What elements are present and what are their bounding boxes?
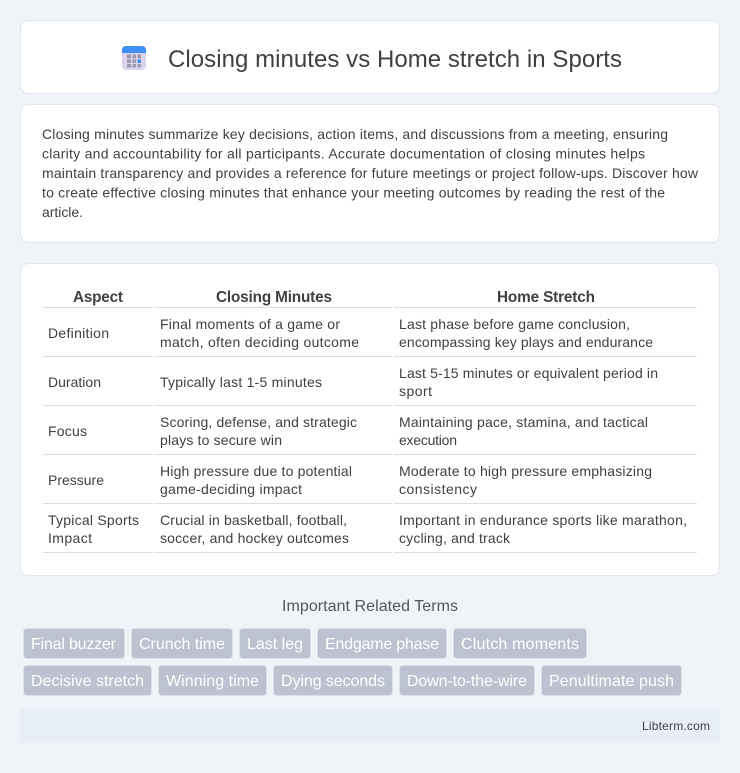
footer — [20, 709, 720, 743]
row: pressure: consistency — [399, 481, 477, 497]
row: focus: Maintaining pace, stamina, and tactical — [399, 414, 648, 430]
tag: decisive stretch: Decisive stretch — [31, 673, 144, 690]
tag: crunch time: Crunch time — [139, 636, 225, 653]
row: pressure: Moderate to high pressure emphasizing — [399, 463, 652, 479]
tag: decisive stretch — [24, 666, 152, 696]
row: definition: Definition — [48, 325, 109, 341]
row: typical sports impact: Important in endurance sports like marathon, — [399, 512, 687, 528]
table header — [73, 289, 595, 306]
heading: important related terms: Important Related Terms — [282, 598, 458, 615]
title: Closing minutes vs Home stretch in Sports — [168, 46, 622, 73]
row: pressure — [48, 463, 652, 497]
table header: Aspect — [73, 289, 123, 306]
table header: Closing Minutes — [216, 289, 332, 306]
row: typical sports impact: cycling, and track — [399, 530, 511, 546]
tag: clutch moments — [454, 628, 586, 658]
tag: penultimate push — [542, 666, 682, 696]
tag: final buzzer — [24, 628, 124, 658]
row: focus: execution — [399, 432, 457, 448]
row: typical sports impact: Crucial in basketball, football, — [160, 512, 347, 528]
row: focus: plays to secure win — [160, 432, 282, 448]
row: focus — [48, 414, 648, 448]
row: duration — [48, 365, 658, 399]
tag: clutch moments: Clutch moments — [461, 636, 579, 653]
row: definition: Final moments of a game or — [160, 316, 340, 332]
header panel — [20, 20, 720, 94]
row: typical sports impact: Impact — [48, 530, 92, 546]
row: duration: Last 5-15 minutes or equivalent period in — [399, 365, 658, 381]
tag: endgame phase: Endgame phase — [325, 636, 439, 653]
tag group: related terms — [24, 628, 682, 696]
row: definition: Last phase before game conclusion, — [399, 316, 630, 332]
text block: description: clarity and accountability for all participants. Accurate documentation of closing minutes helps — [42, 146, 645, 162]
row: typical sports impact — [48, 512, 687, 546]
row: pressure: game-deciding impact — [160, 481, 302, 497]
text block: description: article. — [42, 204, 83, 220]
tag: winning time — [158, 666, 266, 696]
table header: Home Stretch — [497, 289, 595, 306]
row: focus: Focus — [48, 423, 87, 439]
tag: penultimate push: Penultimate push — [549, 673, 674, 690]
icon: calendar — [122, 46, 146, 70]
row: duration: sport — [399, 383, 432, 399]
row: pressure: High pressure due to potential — [160, 463, 352, 479]
row: focus: Scoring, defense, and strategic — [160, 414, 357, 430]
text block: description — [42, 126, 699, 220]
tag: final buzzer: Final buzzer — [31, 636, 117, 653]
tag: last leg — [240, 628, 310, 658]
panel: comparison table — [20, 264, 720, 576]
text block: description: to create effective closing minutes that enhance your meeting outcomes by reading the rest of the — [42, 184, 665, 200]
tag: down-to-the-wire: Down-to-the-wire — [407, 673, 527, 690]
panel: description — [20, 104, 720, 242]
footer credit: Libterm.com — [642, 719, 710, 733]
row: definition: match, often deciding outcome — [160, 334, 359, 350]
text block: description: Closing minutes summarize key decisions, action items, and discussions from a meeting, ensuring — [42, 126, 668, 142]
row: duration: Typically last 1-5 minutes — [160, 374, 322, 390]
tag: dying seconds: Dying seconds — [281, 673, 385, 690]
tag: dying seconds — [274, 666, 392, 696]
tag: crunch time — [132, 628, 232, 658]
tag: last leg: Last leg — [247, 636, 303, 653]
row: typical sports impact: soccer, and hockey outcomes — [160, 530, 349, 546]
text block: description: maintain transparency and provides a reference for future meetings or project follow-ups. Discover how — [42, 165, 699, 181]
tag: down-to-the-wire — [400, 666, 534, 696]
row: definition — [48, 316, 653, 350]
tag: endgame phase — [318, 628, 446, 658]
row: definition: encompassing key plays and endurance — [399, 334, 653, 350]
row: duration: Duration — [48, 374, 101, 390]
row: pressure: Pressure — [48, 472, 104, 488]
row: typical sports impact: Typical Sports — [48, 512, 139, 528]
tag: winning time: Winning time — [166, 673, 259, 690]
